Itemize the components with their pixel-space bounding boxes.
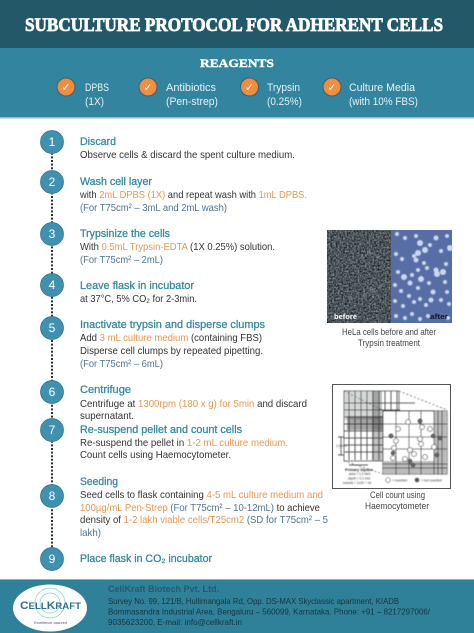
reagent: culture media xyxy=(323,78,418,108)
reagent: trypsin: Trypsin xyxy=(267,82,300,94)
reagent: trypsin: ✓ xyxy=(245,82,254,94)
reagent: DPBS: (1X) xyxy=(85,96,104,108)
haemocytometer diagram: 1.0 mm xyxy=(336,444,347,448)
reagent: DPBS: DPBS xyxy=(85,82,109,94)
step 4: leave flask in incubator xyxy=(40,274,197,305)
caption: cell count: Cell count using xyxy=(370,489,425,500)
reagents heading: REAGENTS xyxy=(200,56,274,70)
step 3: trypsinize the cells: Trypsinize the cells xyxy=(80,228,170,240)
company address: 9035623200, E-mail: info@cellkraft.in xyxy=(108,617,242,627)
company address: Bommasandra Industrial Area, Bengaluru – 560099, Karnataka. Phone: +91 – 8217297006/ xyxy=(108,606,431,616)
step 1: discard: Discard xyxy=(80,136,116,148)
logo: CellKraft: CELLKRAFT xyxy=(20,600,82,612)
step 8: seeding xyxy=(40,476,328,539)
step 8: seeding: lakh) xyxy=(80,528,101,539)
reagent: trypsin: (0.25%) xyxy=(267,96,302,108)
logo: CellKraft xyxy=(13,584,87,632)
reagent: DPBS: ✓ xyxy=(61,82,71,94)
step 6: centrifuge: 6 xyxy=(49,385,56,399)
haemocytometer diagram: = not counted xyxy=(421,478,442,482)
step 8: seeding: Seed cells to flask containing 4-5 mL culture medium and xyxy=(80,490,323,501)
step 8: seeding: density of 1-2 lakh viable cells/T25cm2 (SD for T75cm² – 5 xyxy=(80,515,328,526)
step 2: wash cell layer xyxy=(40,170,307,214)
step 7: re-suspend pellet and count cells: Re-suspend the pellet in 1-2 mL culture medium. xyxy=(80,438,288,449)
step 9: place flask in incubator: 9 xyxy=(49,552,56,566)
step 4: leave flask in incubator: 4 xyxy=(49,278,56,292)
haemocytometer diagram: depth = 0.1 mm xyxy=(348,476,371,480)
step 5: inactivate trypsin and disperse clumps: Disperse cell clumps by repeated pipetting. xyxy=(80,346,263,357)
reagent: antibiotics: Antibiotics xyxy=(166,82,216,94)
company name: CellKraft Biotech Pvt. Ltd. xyxy=(108,584,219,595)
step 7: re-suspend pellet and count cells: Re-suspend pellet and count cells xyxy=(80,424,242,436)
step 3: trypsinize the cells: 3 xyxy=(49,227,56,241)
step 1: discard xyxy=(40,130,295,161)
reagent: antibiotics: ✓ xyxy=(143,82,153,94)
step 5: inactivate trypsin and disperse clumps: (For T75cm² – 6mL) xyxy=(80,359,163,370)
step 1: discard: Observe cells & discard the spent culture medium. xyxy=(80,150,295,161)
caption: cell count: Haemocytometer xyxy=(365,500,429,511)
title banner xyxy=(0,0,474,48)
step 5: inactivate trypsin and disperse clumps: Inactivate trypsin and disperse clumps xyxy=(80,319,265,331)
step 2: wash cell layer: Wash cell layer xyxy=(80,176,152,188)
step 5: inactivate trypsin and disperse clumps: Add 3 mL culture medium (containing FBS) xyxy=(80,333,262,344)
step 1: discard: 1 xyxy=(49,135,56,149)
step 2: wash cell layer: 2 xyxy=(49,175,56,189)
step 6: centrifuge xyxy=(40,380,307,422)
reagent: antibiotics: (Pen-strep) xyxy=(166,96,218,108)
caption: HeLa cells: HeLa cells before and after xyxy=(342,326,436,337)
reagent: culture media: (with 10% FBS) xyxy=(349,96,418,108)
haemocytometer diagram: Primary Square xyxy=(345,468,373,472)
haemocytometer diagram: area = 1.0 mm² xyxy=(349,472,371,476)
haemocytometer diagram: volume = 1x10⁻⁴ ml xyxy=(343,481,371,485)
reagent: trypsin xyxy=(240,78,302,108)
logo: CellKraft: Excellence assured xyxy=(34,621,67,625)
reagent: DPBS xyxy=(57,78,109,108)
caption: HeLa cells: Trypsin treatment xyxy=(358,337,420,348)
company address xyxy=(108,596,431,627)
micrograph: before and after: after xyxy=(430,312,448,321)
reagent: culture media: Culture Media xyxy=(349,82,415,94)
figure: HeLa cells before and after xyxy=(327,230,453,348)
title banner: SUBCULTURE PROTOCOL FOR ADHERENT CELLS xyxy=(25,16,443,36)
step 3: trypsinize the cells xyxy=(40,222,275,266)
reagent: antibiotics xyxy=(139,78,218,108)
caption: HeLa cells xyxy=(342,326,436,348)
step 9: place flask in incubator xyxy=(40,548,212,570)
micrograph: before and after xyxy=(327,230,453,323)
step 3: trypsinize the cells: With 0.5mL Trypsin-EDTA (1X 0.25%) solution. xyxy=(80,242,275,253)
step 4: leave flask in incubator: Leave flask in incubator xyxy=(80,280,194,292)
step 7: re-suspend pellet and count cells: Count cells using Haemocytometer. xyxy=(80,450,231,461)
footer xyxy=(0,579,474,633)
step 5: inactivate trypsin and disperse clumps xyxy=(40,316,265,370)
panel: reagents xyxy=(0,48,474,118)
figure: haemocytometer cell count xyxy=(332,384,450,511)
caption: cell count xyxy=(365,489,429,511)
step 7: re-suspend pellet and count cells xyxy=(40,418,288,461)
reagent: culture media: ✓ xyxy=(327,82,337,94)
haemocytometer diagram xyxy=(332,384,450,488)
step 8: seeding: 100µg/mL Pen-Strep (For T75cm² – 10-12mL) to achieve xyxy=(80,503,320,514)
timeline connector xyxy=(51,142,53,559)
micrograph: before and after: before xyxy=(334,312,357,321)
step 4: leave flask in incubator: at 37°C, 5% CO₂ for 2-3min. xyxy=(80,294,197,305)
haemocytometer diagram: = counted xyxy=(392,478,407,482)
company address: Survey No. 99, 121/B, Hullimangala Rd, Opp. DS-MAX Skyclassic apartment, KIADB xyxy=(108,596,399,606)
step 6: centrifuge: Centrifuge at 1300rpm (180 x g) for 5min and discard xyxy=(80,399,307,410)
step 2: wash cell layer: (For T75cm² – 3mL and 2mL wash) xyxy=(80,203,227,214)
step 6: centrifuge: supernatant. xyxy=(80,411,134,422)
step 8: seeding: 8 xyxy=(49,489,56,503)
step 5: inactivate trypsin and disperse clumps: 5 xyxy=(49,321,56,335)
step 6: centrifuge: Centrifuge xyxy=(80,384,131,396)
step 2: wash cell layer: with 2mL DPBS (1X) and repeat wash with 1mL DPBS. xyxy=(79,190,307,201)
step 3: trypsinize the cells: (For T75cm² – 2mL) xyxy=(80,255,163,266)
step 8: seeding: Seeding xyxy=(80,476,118,488)
step 7: re-suspend pellet and count cells: 7 xyxy=(49,423,56,437)
step 9: place flask in incubator: Place flask in CO₂ incubator xyxy=(80,553,212,565)
